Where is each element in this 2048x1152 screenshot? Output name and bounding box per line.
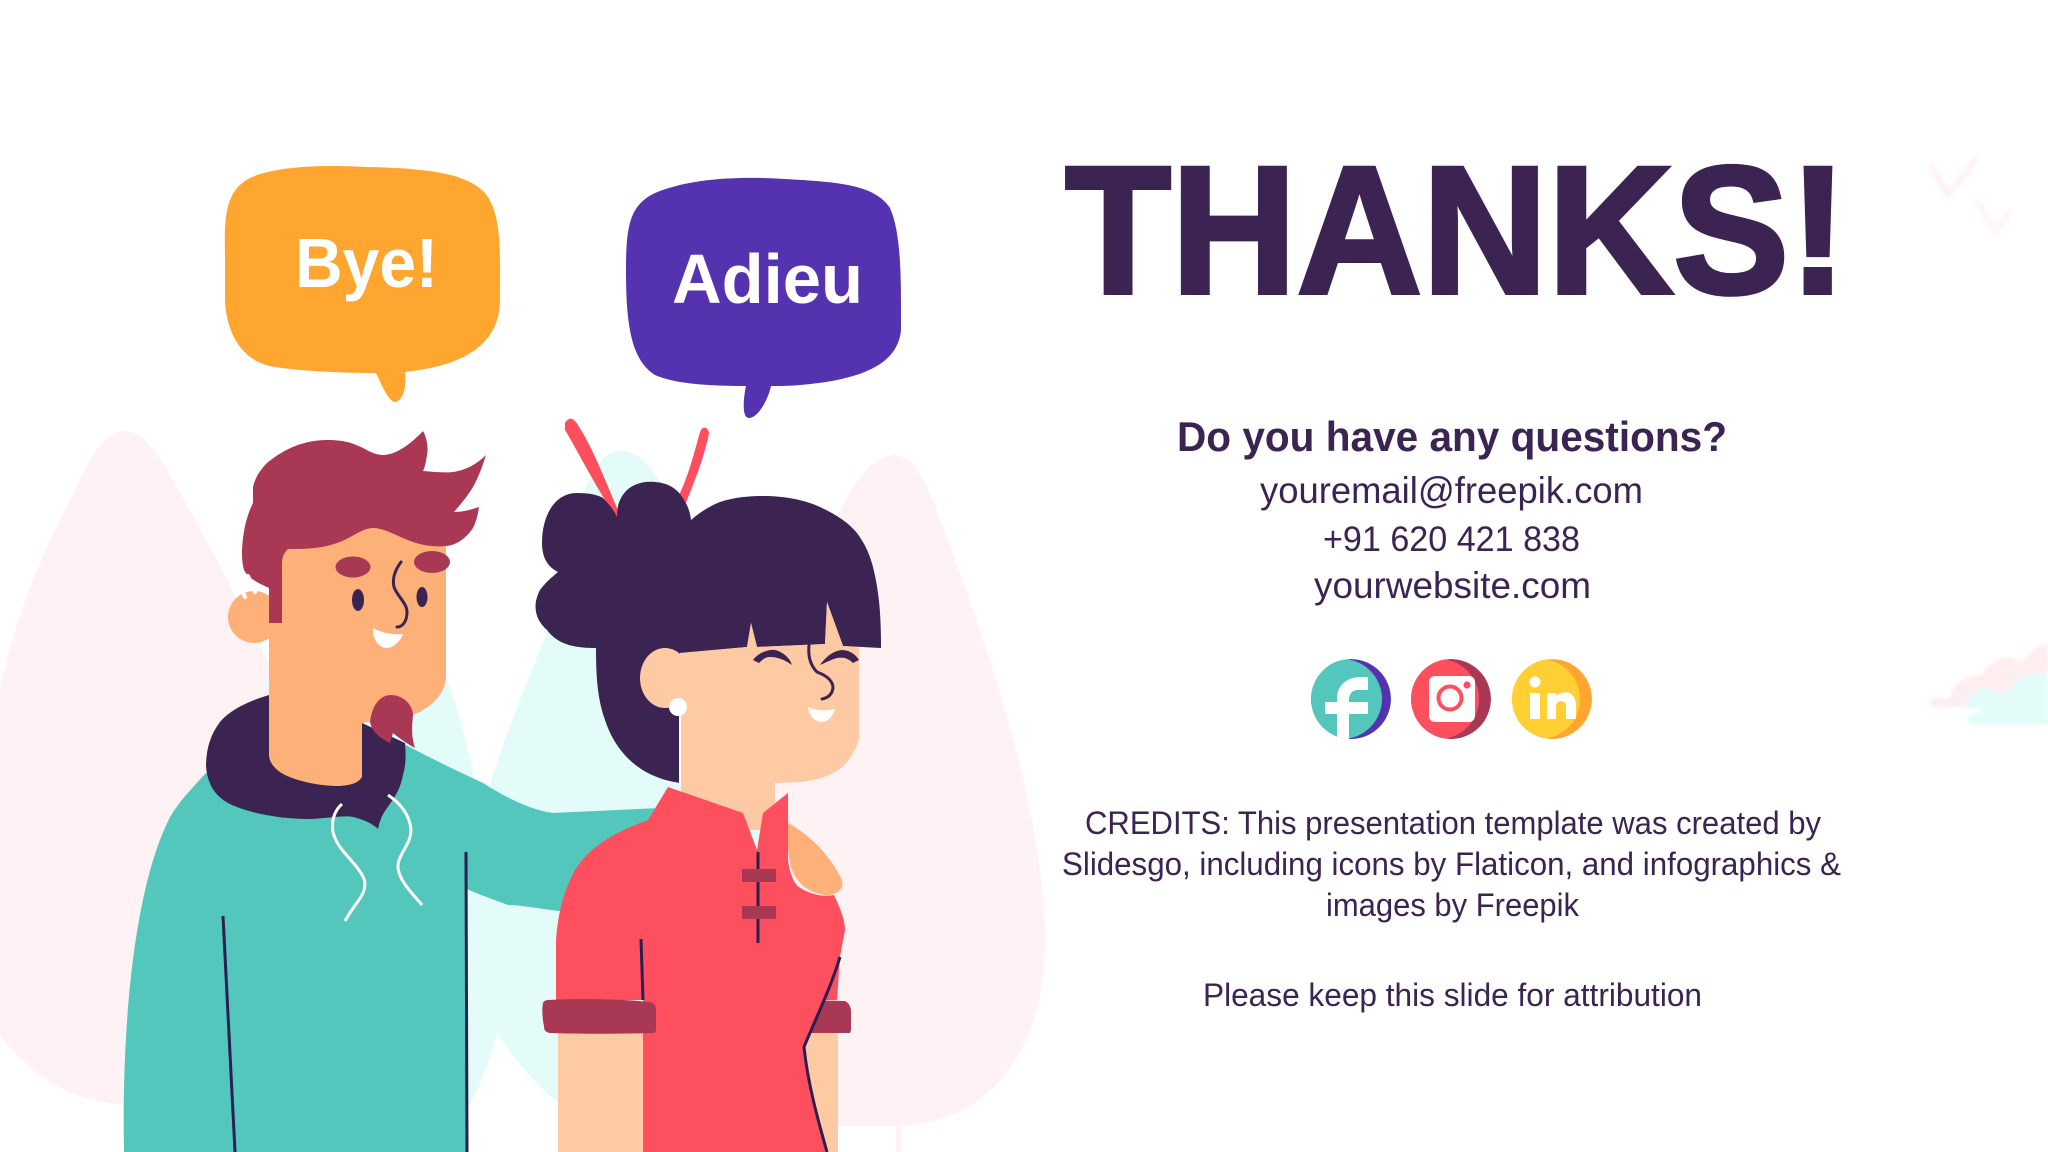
left arm skin (558, 1030, 643, 1152)
speech bubble: Bye! (225, 166, 500, 402)
speech bubble: Adieu (626, 178, 901, 418)
phone: +91 620 421 838 (1323, 520, 1580, 559)
icon: facebook (1311, 659, 1391, 739)
man eyebrows (336, 551, 450, 578)
man eyes (352, 587, 428, 611)
dress placket (756, 852, 760, 943)
contact block (1177, 413, 1727, 606)
hood strings (332, 804, 365, 921)
background trees (0, 431, 1045, 1152)
right arm skin (800, 1033, 838, 1152)
man hair highlights (241, 576, 255, 597)
right shoulder (788, 823, 843, 895)
decorative checks (1932, 160, 2010, 232)
email: youremail@freepik.com (1260, 470, 1643, 511)
character: woman (536, 419, 881, 1152)
credits text: Slidesgo, including icons by Flaticon, and infographics & (1062, 846, 1841, 882)
credits text: CREDITS: This presentation template was created by (1085, 805, 1821, 841)
man nose (393, 562, 407, 627)
man body and arm (124, 745, 660, 1152)
man hood collar (206, 695, 406, 829)
label: Bye!: Bye! (295, 224, 438, 302)
right cuff (800, 1000, 851, 1033)
woman smile (808, 707, 835, 722)
man clothing lines (223, 852, 467, 1152)
credits text: images by Freepik (1326, 887, 1580, 923)
man ear (228, 591, 280, 643)
left cuff (542, 999, 656, 1034)
man smile (373, 628, 403, 648)
title: THANKS! (1065, 128, 1847, 332)
social icons (1302, 659, 1592, 742)
hair sticks (565, 419, 709, 518)
credits text (1062, 805, 1841, 923)
icon: instagram (1411, 659, 1491, 739)
man hair (242, 431, 486, 623)
icon: linkedin (1512, 659, 1592, 739)
label: Adieu: Adieu (672, 240, 863, 318)
woman face and neck (681, 602, 859, 830)
decorative cloud (1929, 643, 2048, 725)
man goatee (370, 695, 415, 748)
red dress (556, 787, 845, 1152)
woman hair (536, 482, 881, 783)
question heading: Do you have any questions? (1177, 413, 1727, 460)
dress buttons (742, 869, 776, 919)
earring (669, 698, 687, 716)
woman eyes (753, 650, 859, 665)
character: man (124, 431, 660, 1152)
website: yourwebsite.com (1314, 565, 1591, 606)
dress lines (641, 939, 840, 1152)
woman nose (809, 645, 833, 699)
attribution note: Please keep this slide for attribution (1203, 977, 1702, 1013)
woman ear (640, 648, 690, 708)
man face and neck (269, 520, 446, 786)
